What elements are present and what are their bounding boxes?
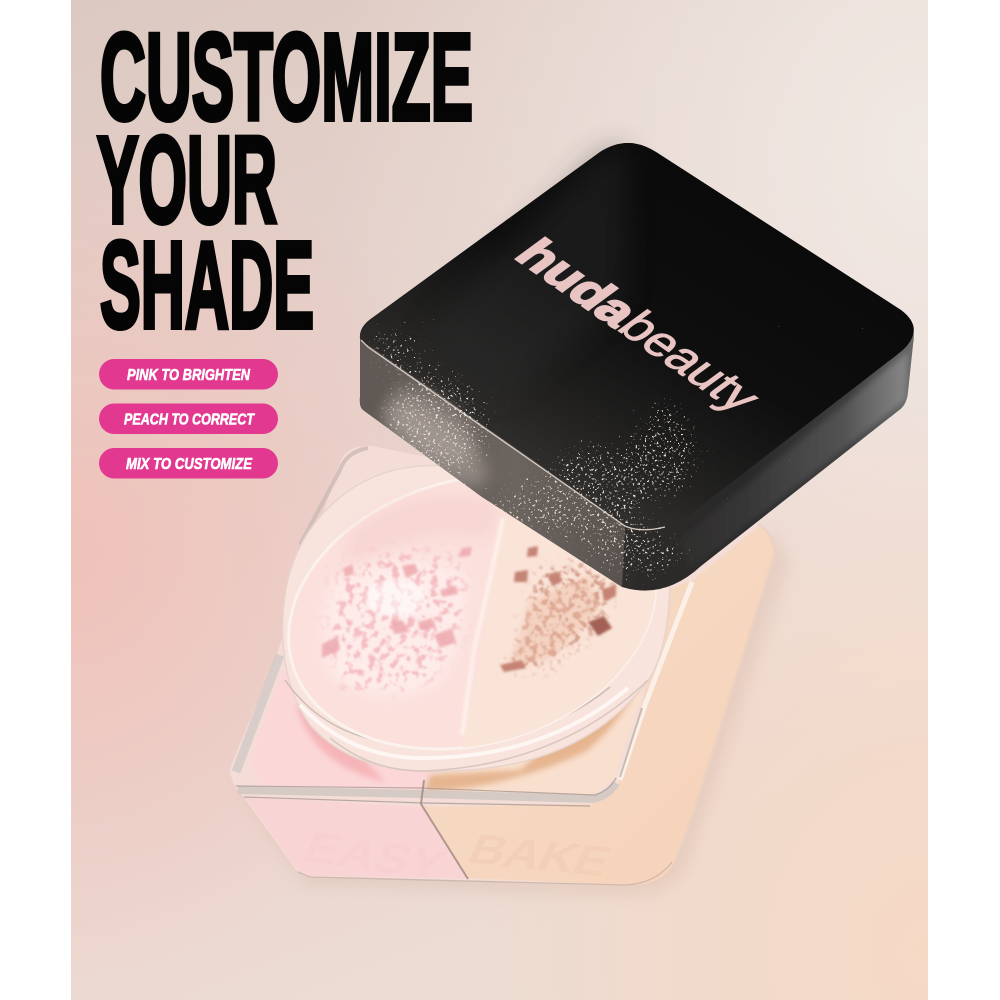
pill: pink to brighten xyxy=(99,359,278,390)
jar xyxy=(230,446,776,889)
pill: peach to correct: PEACH TO CORRECT xyxy=(124,412,255,428)
sifter: pink powder cloud xyxy=(325,560,466,695)
jar: right inner glass line xyxy=(620,708,642,777)
pill: pink to brighten: PINK TO BRIGHTEN xyxy=(127,367,251,384)
lid: brand logo xyxy=(504,230,773,420)
lid: brand logo: huda xyxy=(504,230,652,335)
jar: pink inner floor xyxy=(252,670,470,790)
lid: powder fog xyxy=(378,383,492,491)
sifter: pink clumps xyxy=(322,545,465,695)
lid: left side wall lightening xyxy=(360,338,625,587)
lid: body and side wall xyxy=(360,143,914,591)
sifter: rose clump accents xyxy=(322,547,472,658)
jar shadow xyxy=(240,530,790,896)
jar: embossed BAKE: BAKE xyxy=(461,825,619,885)
title: SHADE xyxy=(100,218,314,354)
sifter: peach clumps xyxy=(505,560,618,675)
jar: pink front face xyxy=(245,797,468,878)
lid: rim highlight xyxy=(361,340,665,530)
jar: upper left glass corner xyxy=(300,448,368,545)
sifter: dark clump accents xyxy=(500,546,616,672)
lid: powder speckles xyxy=(365,321,703,583)
jar: right inner glass edge xyxy=(620,582,692,780)
sifter: upper pink shade xyxy=(345,495,500,570)
title xyxy=(97,10,473,354)
jar: peach powder below sifter xyxy=(425,600,668,792)
sifter: peach half xyxy=(462,590,656,748)
sifter: disc xyxy=(256,434,688,790)
pill: peach to correct xyxy=(99,404,278,434)
jar: embossed EASY: EASY xyxy=(296,823,454,889)
pill: mix to customize: MIX TO CUSTOMIZE xyxy=(126,456,253,473)
lid: brand logo: beauty xyxy=(607,302,773,420)
jar: centre seam xyxy=(421,780,468,879)
jar: glass base outline xyxy=(230,446,776,885)
jar: right highlight edge xyxy=(676,524,775,858)
jar: glass rim shadow xyxy=(236,778,616,806)
jar: glass rim band xyxy=(238,783,616,799)
sifter: white powder highlight xyxy=(365,580,425,616)
lid: face sheen xyxy=(420,146,628,400)
lid xyxy=(360,143,914,591)
jar: peach inner floor xyxy=(425,610,662,794)
sifter: divider xyxy=(462,518,503,735)
sifter: outer ring xyxy=(283,466,670,771)
sifter disc xyxy=(282,465,670,772)
jar: lower edge line xyxy=(298,862,672,885)
pill: mix to customize xyxy=(99,448,278,478)
title: CUSTOMIZE xyxy=(100,10,473,146)
sifter: lower rim lines xyxy=(285,680,648,771)
jar: peach front and side face xyxy=(424,527,776,885)
jar: left glass edge xyxy=(236,655,280,772)
title: YOUR xyxy=(97,112,277,250)
sifter: peach powder haze xyxy=(510,575,600,665)
lid: side sheen xyxy=(710,354,910,547)
jar: pink residue xyxy=(296,705,385,782)
lid: top face xyxy=(360,143,914,530)
